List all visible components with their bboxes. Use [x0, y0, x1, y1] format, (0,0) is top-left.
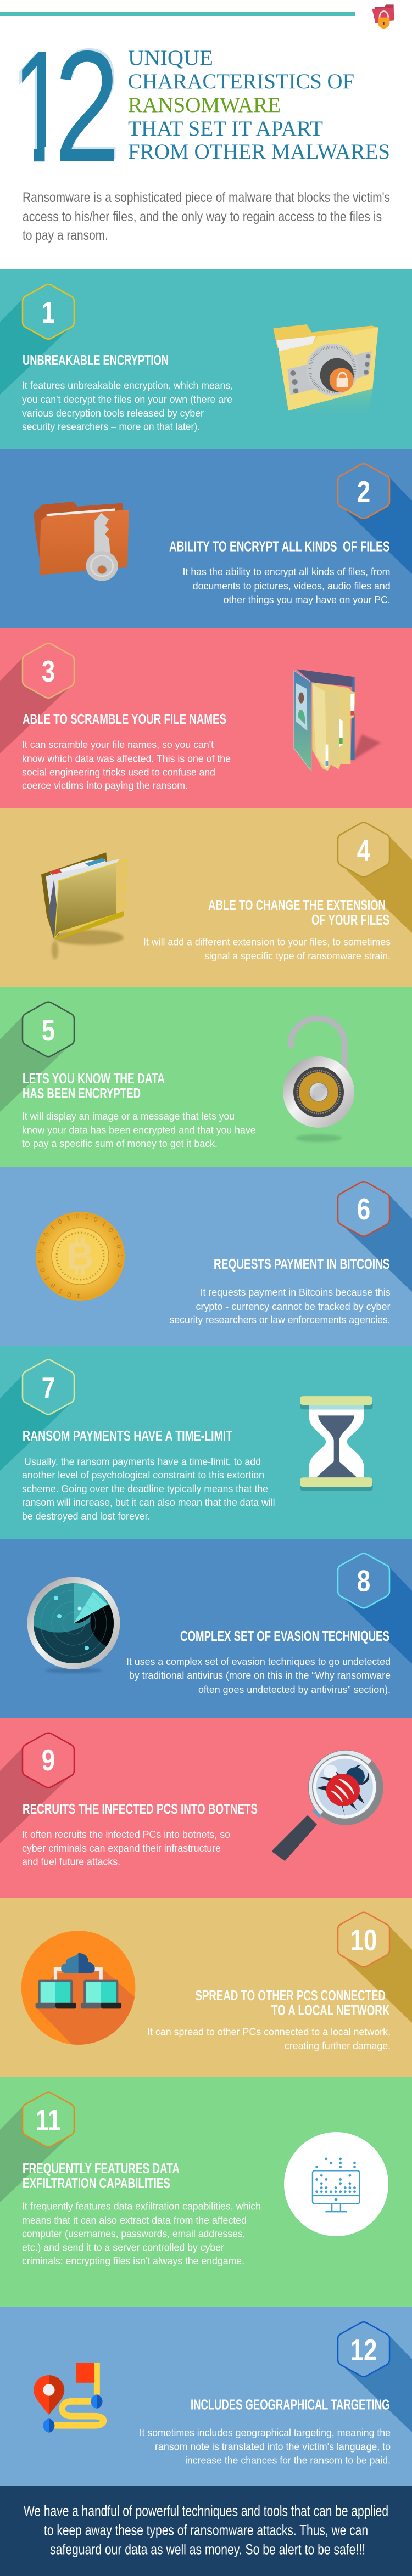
panel 4: change the extension	[0, 808, 412, 987]
body 1: you can't decrypt the files on your own (there are	[22, 393, 232, 405]
body 9: It often recruits the infected PCs into botnets, so	[22, 1829, 230, 1840]
number badge 11: 11	[36, 2103, 61, 2137]
icon: orange folder with key	[34, 502, 129, 581]
panel 6: bitcoins	[0, 1167, 412, 1346]
heading 5	[23, 1071, 165, 1101]
body 1: security researchers – more on that later).	[22, 420, 200, 432]
body 1	[22, 380, 233, 432]
body 2	[182, 566, 391, 605]
panel 5: lets you know	[0, 987, 412, 1167]
icon: golden folder with documents	[41, 852, 127, 959]
body 5: know your data has been encrypted and that you have	[22, 1124, 256, 1136]
number badge 9: 9	[42, 1743, 55, 1777]
body 11: It frequently features data exfiltration capabilities, which	[22, 2201, 261, 2212]
body 7: scheme. Going over the deadline typically means that the	[22, 1483, 268, 1494]
body 2: documents to pictures, videos, audio files and	[193, 580, 391, 592]
number badge 11	[23, 2093, 74, 2147]
heading 10	[196, 1988, 390, 2018]
big number 12: 2	[54, 18, 120, 194]
number badge 4: 4	[357, 834, 370, 868]
body 6: crypto - currency cannot be tracked by cyber	[196, 1301, 390, 1312]
body 5: to pay a specific sum of money to get it back.	[22, 1138, 218, 1149]
number badge 4	[338, 823, 389, 877]
body 10	[147, 2026, 391, 2051]
number badge 2: 2	[357, 475, 370, 509]
icon: logo folder with padlock	[372, 4, 394, 29]
body 11: criminals; encrypting files isn't always the endgame.	[22, 2255, 244, 2266]
heading 5: HAS BEEN ENCRYPTED	[23, 1086, 141, 1101]
body 3: know which data was affected. This is one of the	[22, 753, 231, 764]
icon: radar screen	[27, 1577, 121, 1673]
heading 7: RANSOM PAYMENTS HAVE A TIME-LIMIT	[23, 1428, 232, 1444]
number badge 5: 5	[42, 1013, 55, 1047]
body 5: It will display an image or a message that lets you	[22, 1110, 235, 1122]
icon: hourglass	[300, 1396, 373, 1491]
number badge 1: 1	[42, 295, 55, 329]
panel 2: encrypt all kinds of files	[0, 449, 412, 628]
body 9: and fuel future attacks.	[22, 1856, 120, 1867]
panel 1: unbreakable encryption	[0, 269, 412, 449]
heading 5: LETS YOU KNOW THE DATA	[23, 1071, 165, 1087]
icon: gold bitcoin coin: B	[66, 1235, 94, 1277]
body 7: Usually, the ransom payments have a time-limit, to add	[24, 1455, 261, 1467]
heading 3: ABLE TO SCRAMBLE YOUR FILE NAMES	[23, 712, 226, 727]
icon: cloud connecting two laptops	[21, 1931, 137, 2045]
body 10: creating further damage.	[285, 2040, 391, 2051]
body 6	[170, 1286, 391, 1325]
number badge 7: 7	[42, 1371, 55, 1405]
icon: white circle with monitor	[284, 2132, 388, 2236]
big number 12: 2	[56, 15, 121, 192]
body 9	[22, 1829, 230, 1867]
body 3: It can scramble your file names, so you can't	[22, 739, 214, 750]
panel 8: evasion techniques	[0, 1539, 412, 1718]
panel 10: local network	[0, 1898, 412, 2077]
panel 12: geographical targeting	[0, 2307, 412, 2486]
title: FROM OTHER MALWARES	[128, 140, 390, 164]
body 12: It sometimes includes geographical targeting, meaning the	[140, 2427, 391, 2438]
number badge 5	[23, 1002, 74, 1056]
title: THAT SET IT APART	[128, 117, 323, 140]
title: CHARACTERISTICS OF	[128, 70, 354, 93]
panel 9: botnets	[0, 1718, 412, 1898]
body 8: It uses a complex set of evasion techniques to go undetected	[126, 1656, 391, 1667]
number badge 12	[338, 2322, 389, 2377]
icon: open combination padlock	[283, 1019, 354, 1142]
number badge 2	[338, 464, 389, 519]
title: UNIQUE	[128, 46, 213, 70]
body 4	[143, 936, 391, 961]
big number 12: 1	[10, 19, 64, 196]
icon: yellow folder with combination lock	[273, 324, 378, 420]
body 8	[126, 1656, 391, 1695]
number badge 9	[23, 1733, 74, 1787]
body 12: increase the chances for the ransom to be paid.	[185, 2454, 391, 2466]
heading 11: FREQUENTLY FEATURES DATA	[23, 2161, 180, 2176]
number badge 8	[338, 1554, 389, 1608]
body 7: another level of psychological constraint to this extortion	[22, 1469, 264, 1481]
number badge 7	[23, 1360, 74, 1414]
body 7: be destroyed and lost forever.	[22, 1510, 151, 1522]
number badge 3	[23, 643, 74, 698]
panel 3: scramble file names	[0, 628, 412, 808]
number badge 1	[23, 284, 74, 339]
body 3: coerce victims into paying the ransom.	[22, 779, 188, 791]
body 1: various decryption tools released by cyber	[22, 407, 204, 419]
big number 12: 1	[13, 18, 67, 194]
heading 1: UNBREAKABLE ENCRYPTION	[23, 353, 169, 368]
top bar	[0, 12, 355, 16]
number badge 3: 3	[42, 654, 55, 688]
big number 12	[19, 48, 115, 162]
body 3: social engineering tricks used to confuse and	[22, 766, 215, 778]
heading 11	[23, 2161, 180, 2191]
number badge 8: 8	[357, 1564, 370, 1598]
body 7	[22, 1455, 275, 1522]
icon: gold bitcoin coin: 1 0 1 0 1 0 1 0 1 0 1 0 1 0 1 0 1 0 1 0 1 0	[38, 1214, 123, 1298]
body 3	[22, 739, 231, 791]
body 9: cyber criminals can expand their infrastructure	[22, 1842, 221, 1854]
panel 11: data exfiltration	[0, 2077, 412, 2307]
number badge 10: 10	[350, 1923, 377, 1957]
heading 9: RECRUITS THE INFECTED PCS INTO BOTNETS	[23, 1802, 258, 1817]
panel 7: time-limit	[0, 1346, 412, 1539]
body 2: It has the ability to encrypt all kinds of files, from	[182, 566, 390, 577]
header	[0, 4, 394, 243]
body 4: signal a specific type of ransomware strain.	[204, 950, 391, 961]
intro text	[23, 190, 390, 243]
number badge 6	[338, 1182, 389, 1236]
icon: open folder with tabs	[294, 669, 381, 771]
footer panel	[0, 2486, 412, 2576]
body 12: ransom note is translated into the victim's language, to	[155, 2441, 391, 2452]
body 11: means that it can also extract data from the affected	[22, 2214, 247, 2226]
icon: map pin, route and flag	[34, 2363, 103, 2433]
number badge 6: 6	[357, 1192, 370, 1226]
body 2: other things you may have on your PC.	[224, 594, 391, 605]
title	[128, 46, 390, 164]
title: RANSOMWARE	[128, 93, 281, 117]
body 5	[22, 1110, 256, 1149]
heading 4	[208, 898, 389, 928]
body 11: etc.) and send it to a server controlled by cyber	[22, 2241, 224, 2253]
body 8: by traditional antivirus (more on this in the “Why ransomware	[129, 1669, 391, 1681]
body 12	[140, 2427, 391, 2466]
body 10: It can spread to other PCs connected to a local network,	[147, 2026, 391, 2037]
icon: magnifier with red bug	[273, 1750, 383, 1860]
intro text: to pay a ransom.	[23, 228, 108, 243]
body 1: It features unbreakable encryption, which means,	[22, 380, 233, 391]
number badge 10	[338, 1913, 389, 1967]
body 11: computer (usernames, passwords, email addresses,	[22, 2228, 245, 2239]
body 11	[22, 2201, 261, 2266]
body 6: security researchers or law enforcements agencies.	[170, 1314, 391, 1325]
body 6: It requests payment in Bitcoins because this	[201, 1286, 391, 1298]
body 4: It will add a different extension to your files, to sometimes	[143, 936, 391, 947]
body 8: often goes undetected by antivirus” section).	[198, 1684, 391, 1695]
body 7: ransom will increase, but it can also mean that the data will	[22, 1497, 275, 1508]
closing message	[24, 2502, 388, 2557]
number badge 12: 12	[350, 2333, 377, 2367]
heading 11: EXFILTRATION CAPABILITIES	[23, 2176, 170, 2191]
